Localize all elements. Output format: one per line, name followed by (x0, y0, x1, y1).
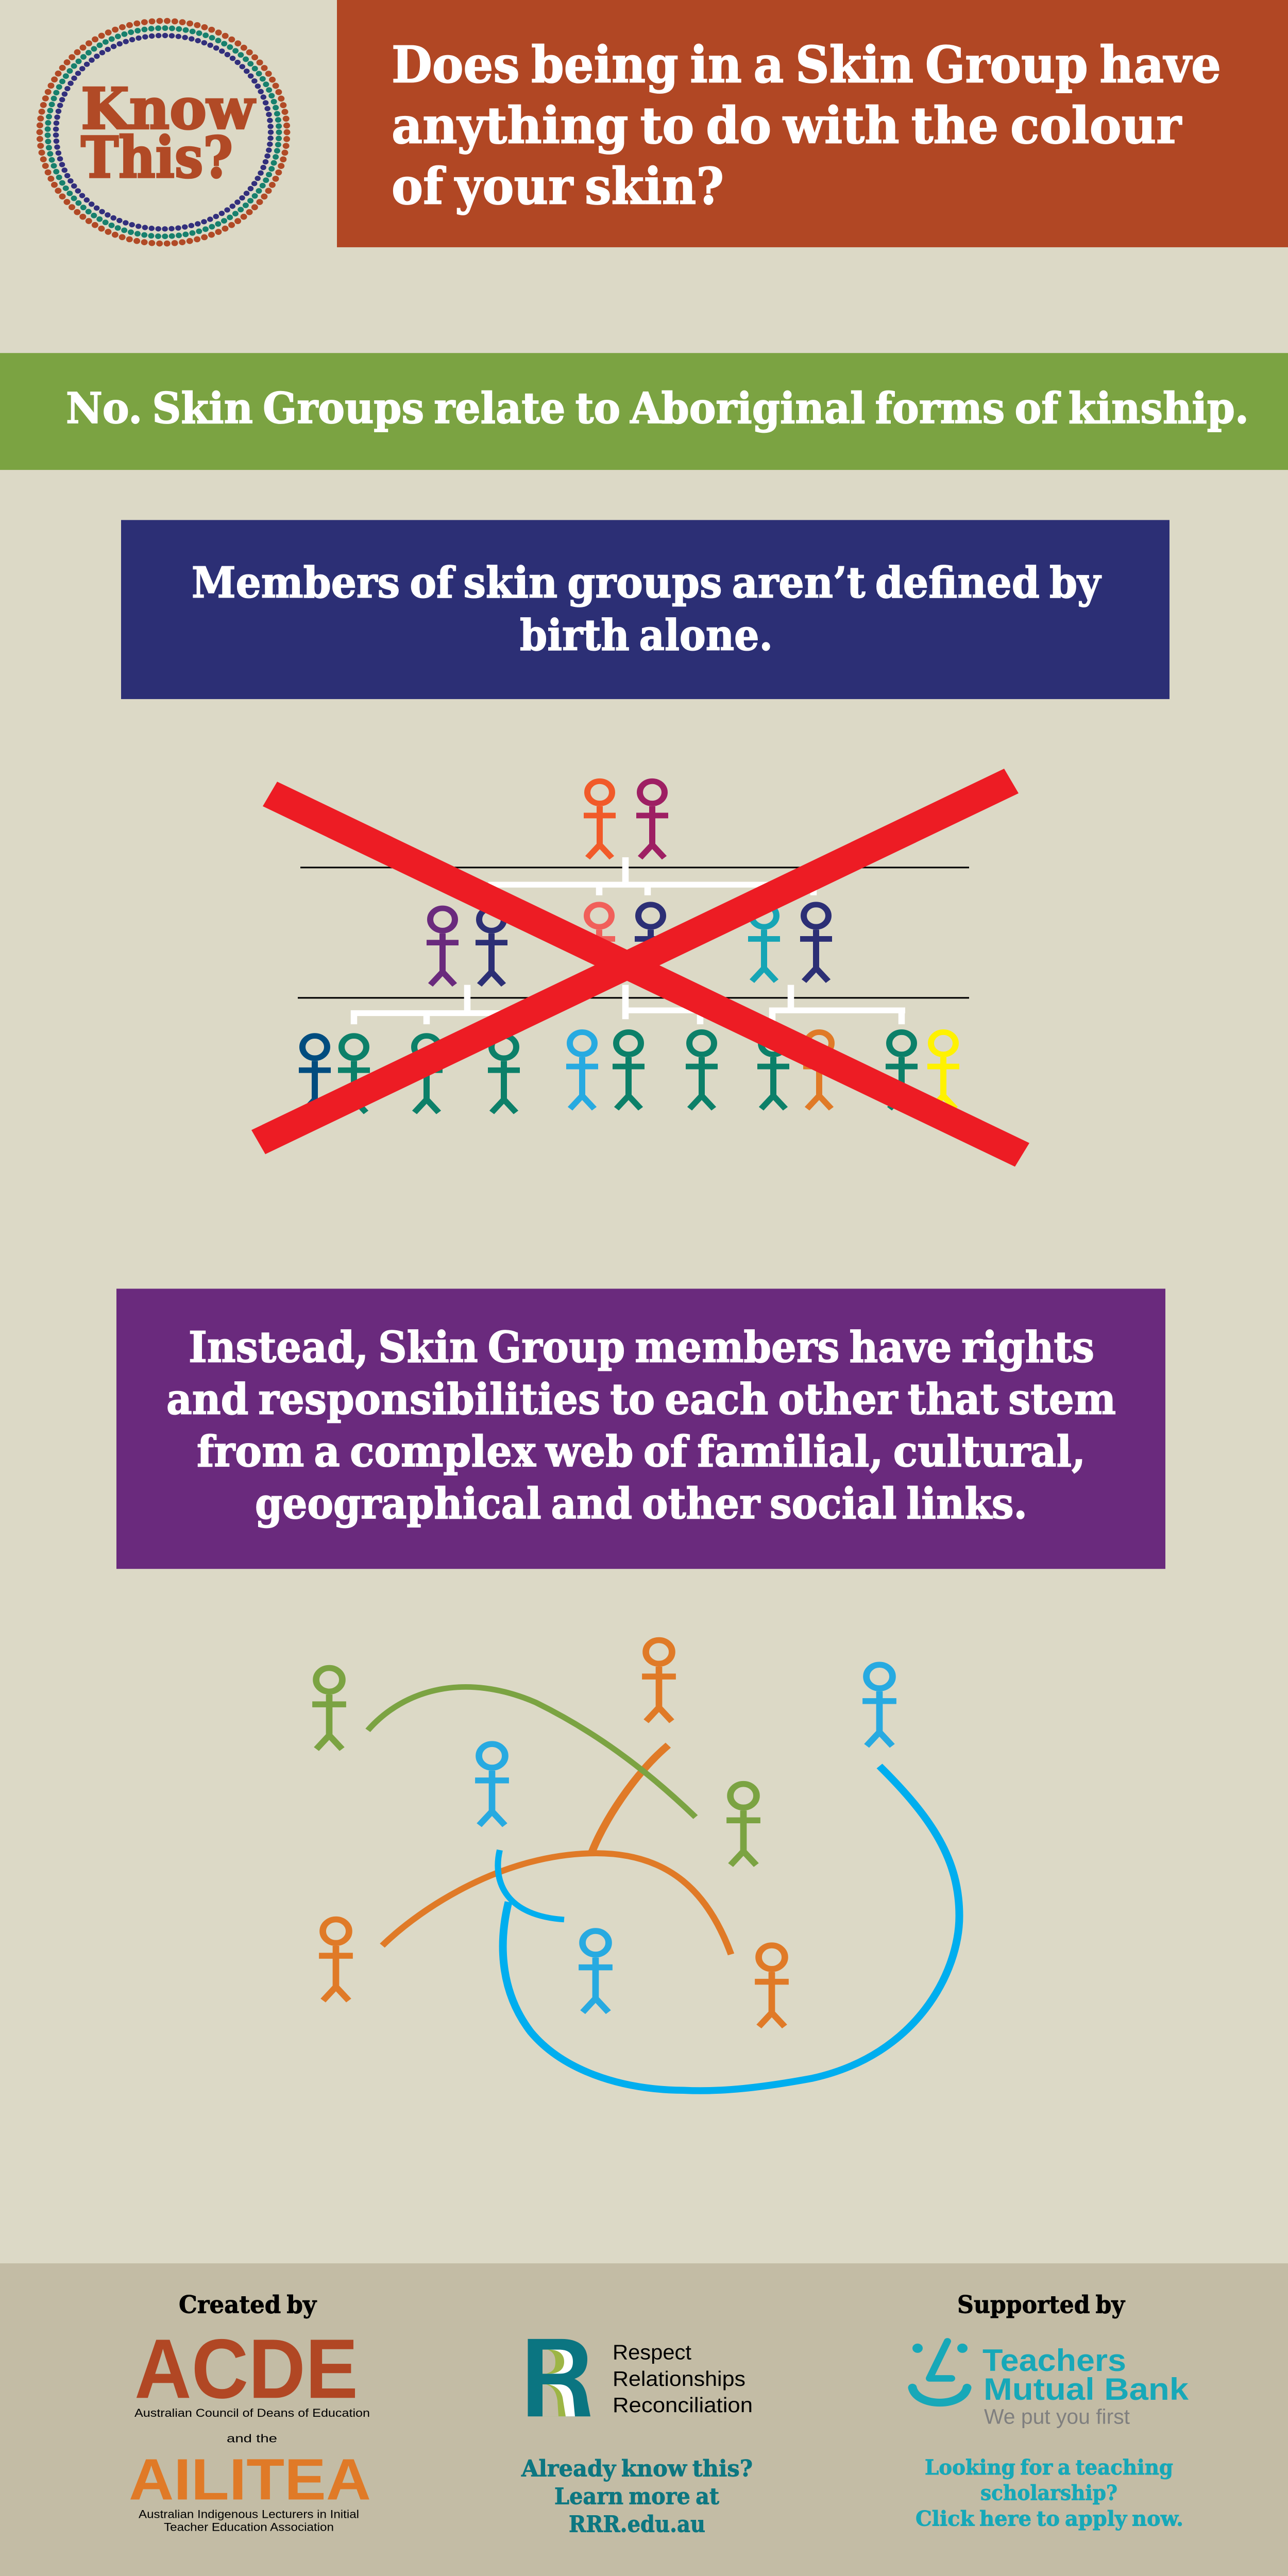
icon: Teachers Mutual Bank smile (912, 2341, 967, 2402)
logo: Know This? dotted circle: This? (81, 125, 233, 191)
panel: title question: of your skin? (392, 157, 724, 216)
red cross (251, 769, 1029, 1167)
panel: title question: anything to do with the colour (392, 96, 1182, 155)
panel: purple statement: and responsibilities to each other that stem (166, 1375, 1116, 1424)
created by column: Teacher Education Association (164, 2521, 334, 2534)
created by column (129, 2291, 371, 2534)
connection curves (368, 1687, 959, 2091)
panel: navy statement: Members of skin groups aren’t defined by (192, 557, 1101, 608)
middle column: RRR.edu.au (569, 2511, 705, 2537)
middle column: Reconciliation (613, 2394, 753, 2417)
supported by column: Looking for a teaching (925, 2455, 1173, 2480)
panel: purple statement (116, 1289, 1165, 1569)
icon: RR logo (528, 2339, 590, 2416)
middle column: Respect (613, 2341, 691, 2364)
supported by column: Supported by (957, 2291, 1125, 2319)
created by column: Australian Indigenous Lecturers in Initial (139, 2508, 359, 2521)
created by column: Australian Council of Deans of Education (134, 2406, 370, 2420)
middle column (521, 2339, 753, 2537)
figures (312, 1640, 896, 2026)
middle column: Already know this? (521, 2455, 753, 2482)
supported by column: Click here to apply now. (916, 2507, 1183, 2531)
supported by column: Mutual Bank (984, 2371, 1189, 2406)
middle column: Learn more at (554, 2483, 719, 2510)
panel: footer (0, 2263, 1288, 2576)
row 1 figures (584, 781, 668, 858)
logo: Know This? dotted circle: Know (81, 76, 256, 142)
row 3 figures (299, 1032, 959, 1112)
logo: Know This? dotted circle (40, 21, 287, 244)
supported by column: Teachers (982, 2343, 1126, 2378)
panel: green answer band (0, 353, 1288, 470)
panel: title question (337, 0, 1288, 247)
created by column: ACDE (134, 2321, 358, 2416)
supported by column (912, 2291, 1189, 2531)
created by column: AILITEA (129, 2447, 371, 2512)
created by column: Created by (179, 2291, 317, 2319)
created by column: and the (227, 2432, 277, 2445)
panel: purple statement: from a complex web of familial, cultural, (197, 1428, 1086, 1477)
supported by column: We put you first (984, 2405, 1130, 2429)
middle column: Relationships (613, 2367, 745, 2391)
chart: crossed-out family tree (251, 769, 1029, 1167)
panel: purple statement: geographical and other social links. (255, 1479, 1027, 1529)
supported by column: scholarship? (980, 2481, 1117, 2505)
row 2 figures (427, 905, 832, 985)
white connectors (351, 857, 905, 1024)
panel: purple statement: Instead, Skin Group members have rights (189, 1323, 1094, 1372)
panel: navy statement: birth alone. (520, 610, 773, 660)
chart: web of social links (312, 1640, 959, 2091)
panel: navy statement (121, 520, 1170, 699)
